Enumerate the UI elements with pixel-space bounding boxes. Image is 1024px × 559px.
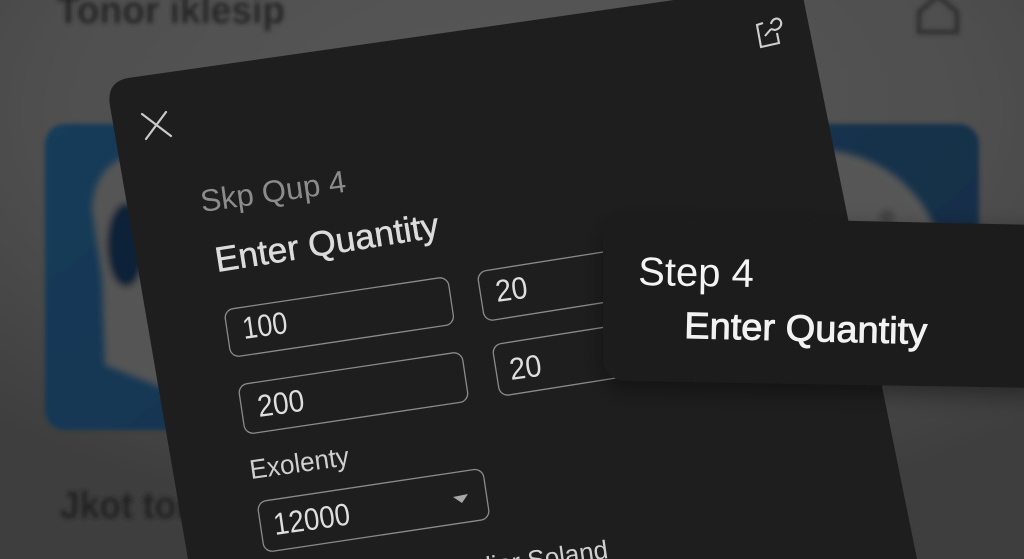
icon: dropdown arrow bbox=[453, 494, 468, 503]
blurred blue card right bbox=[700, 124, 979, 374]
field: 20 lower right bbox=[492, 318, 668, 396]
form heading: Enter Quantity bbox=[212, 206, 442, 280]
field: 200 bbox=[238, 352, 469, 434]
blurred home icon bbox=[919, 0, 957, 32]
callout title: Enter Quantity bbox=[684, 305, 928, 352]
blurred lower text: Jkot tor bbox=[60, 485, 190, 527]
field: 200: 200 bbox=[255, 383, 307, 424]
icon: close bbox=[142, 112, 171, 139]
field: 20 upper right bbox=[477, 245, 653, 321]
field: 20 lower right: 20 bbox=[507, 348, 544, 387]
dropdown: 12000 bbox=[257, 468, 490, 552]
field: 100 bbox=[224, 277, 455, 357]
blurred card artwork right bbox=[790, 149, 934, 300]
blurred card artwork left bbox=[92, 158, 200, 395]
callout step label: Step 4 bbox=[638, 250, 754, 296]
callout: step 4 bbox=[603, 216, 1024, 388]
panel: dark modal bbox=[109, 0, 917, 559]
step eyebrow: Skp Qup 4 bbox=[198, 164, 348, 219]
field: 100: 100 bbox=[240, 305, 290, 346]
field: 20 upper right: 20 bbox=[493, 270, 530, 309]
blurred blue card left bbox=[45, 124, 445, 430]
dropdown: 12000: 12000 bbox=[271, 497, 352, 542]
label: Exolenty: Exolenty bbox=[248, 441, 351, 485]
icon: share bbox=[757, 19, 781, 47]
